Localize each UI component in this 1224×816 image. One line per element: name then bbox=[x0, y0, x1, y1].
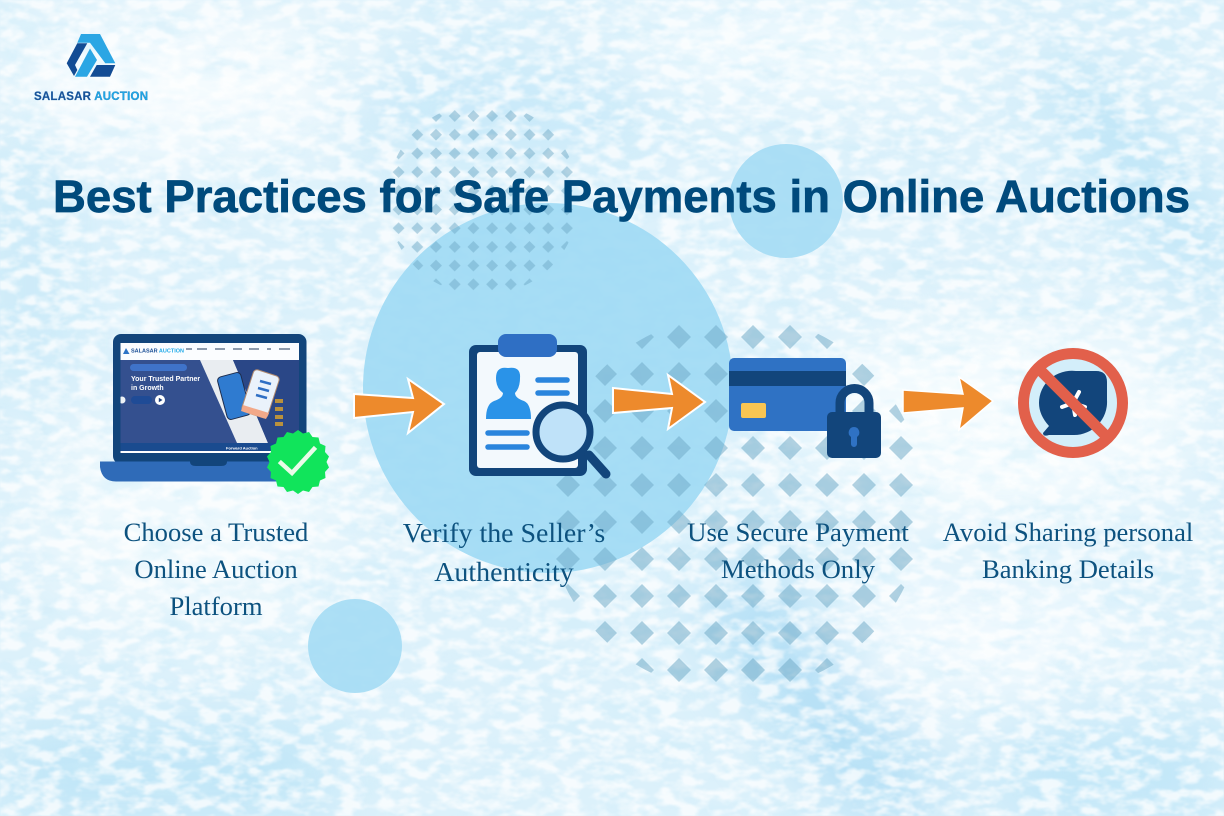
decorative circle: small bottom left bbox=[308, 599, 402, 693]
magnifier bbox=[536, 405, 606, 474]
logo mark bbox=[67, 34, 115, 77]
credit card bbox=[729, 358, 846, 431]
clipboard bbox=[469, 345, 587, 476]
decorative halftone diamonds: lower cluster bbox=[546, 314, 924, 692]
logo: Salasar Auction bbox=[34, 34, 148, 103]
laptop screen: Forward Auction bbox=[226, 446, 258, 450]
step 2 label: Verify the Seller’s bbox=[403, 518, 605, 549]
person silhouette bbox=[486, 368, 531, 419]
asterisk bbox=[1062, 392, 1085, 415]
step 1 label: Choose a Trusted bbox=[124, 517, 308, 547]
verified badge bbox=[267, 430, 329, 494]
step 1 label: Platform bbox=[169, 591, 263, 621]
logo wordmark: SALASAR AUCTION bbox=[34, 91, 148, 103]
text lines bbox=[488, 380, 567, 447]
clipboard tab bbox=[498, 334, 557, 357]
step 2 label: Authenticity bbox=[434, 557, 574, 588]
step 1 label: Online Auction bbox=[134, 554, 298, 584]
chat bubble bbox=[1039, 371, 1107, 436]
decorative circle: small top right bbox=[729, 144, 843, 258]
step 4 icon: no sharing sign bbox=[1023, 353, 1123, 453]
step 2 icon: clipboard with magnifier bbox=[469, 334, 606, 476]
laptop body bbox=[113, 334, 306, 464]
decorative halftone diamonds: upper cluster bbox=[387, 103, 579, 295]
laptop base bbox=[100, 462, 292, 482]
phones bbox=[217, 372, 251, 420]
laptop screen: in Growth bbox=[131, 385, 164, 392]
step 1 icon: laptop with website bbox=[100, 334, 329, 494]
hero heading: Your Trusted Partner bbox=[131, 376, 200, 383]
title: Best Practices for Safe Payments in Online Auctions bbox=[53, 171, 1190, 222]
arrow 2 bbox=[613, 375, 705, 429]
padlock bbox=[827, 388, 881, 458]
arrow 1 bbox=[354, 379, 444, 433]
step 4 label: Avoid Sharing personal bbox=[943, 517, 1193, 547]
step 4 label: Banking Details bbox=[982, 554, 1154, 584]
prohibition ring bbox=[1024, 354, 1122, 452]
arrow 3 bbox=[903, 377, 993, 430]
decorative circle: large centre bbox=[363, 203, 733, 573]
step 3 icon: credit card and padlock bbox=[729, 358, 881, 458]
laptop screen bbox=[118, 343, 299, 453]
step 3 label: Use Secure Payment bbox=[687, 517, 909, 547]
step 3 label: Methods Only bbox=[721, 554, 876, 584]
laptop screen: SALASAR AUCTION bbox=[131, 348, 184, 354]
